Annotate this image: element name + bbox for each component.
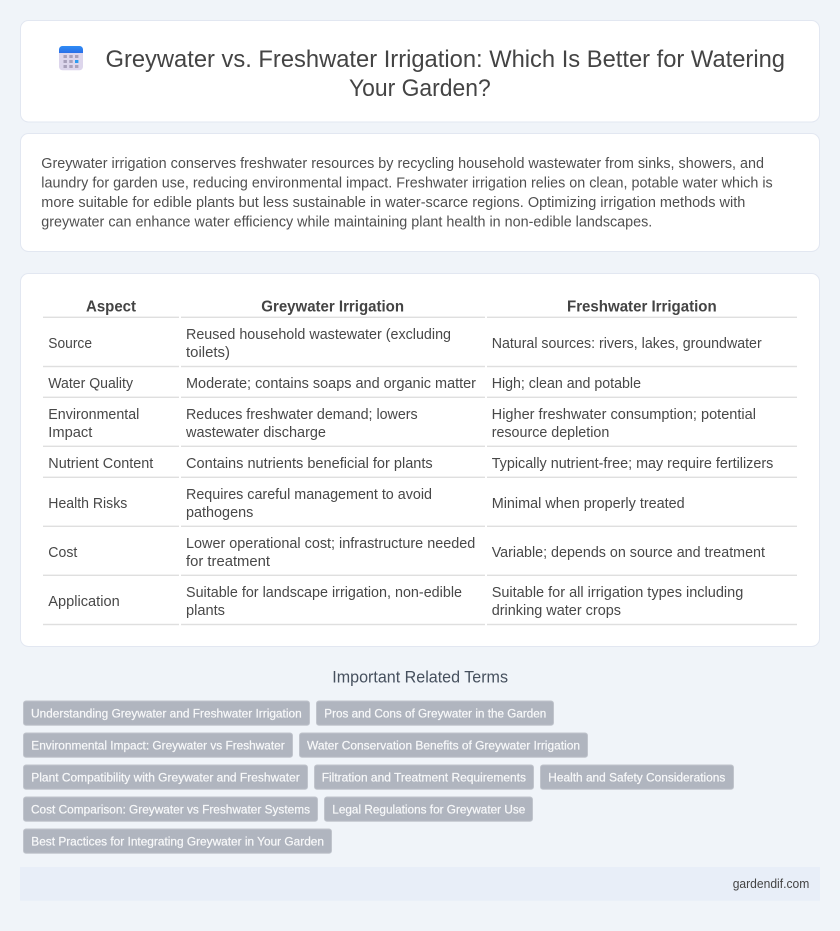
chip (316, 701, 554, 725)
row: nutrient content (48, 456, 773, 472)
panel: introduction text: laundry for garden use, reducing environmental impact. Freshwater irrigation relies on clean, potable water which is (41, 174, 773, 191)
row: environmental impact (48, 407, 756, 441)
row: water quality (48, 376, 641, 392)
row: cost: Cost (48, 545, 77, 561)
row: application: Suitable for all irrigation types including (492, 585, 743, 601)
row: health risks: Health Risks (48, 496, 127, 512)
table header row: Aspect (86, 299, 136, 316)
row: source (48, 327, 762, 361)
chip (540, 765, 734, 789)
footer bar: gardendif.com (733, 876, 809, 891)
title: Greywater vs. Freshwater Irrigation: Which Is Better for Watering (106, 46, 785, 73)
row: water quality: High; clean and potable (492, 376, 641, 392)
row: environmental impact: Impact (48, 425, 92, 441)
row: water quality: Moderate; contains soaps and organic matter (186, 376, 476, 392)
table header row (86, 299, 717, 316)
chip (314, 765, 534, 789)
row: application: plants (186, 603, 225, 619)
panel: introduction text: more suitable for edible plants but less sustainable in water-scarce regions. Optimizing irrigation methods with (41, 194, 745, 211)
table header row: Greywater Irrigation (261, 299, 404, 316)
chip: Filtration and Treatment Requirements (322, 770, 526, 784)
table header row: Freshwater Irrigation (567, 299, 717, 316)
chip (24, 733, 292, 757)
panel: introduction text: Greywater irrigation conserves freshwater resources by recycling household wastewater from sinks, showers, and (41, 155, 764, 172)
chip: Pros and Cons of Greywater in the Garden (324, 706, 546, 720)
row: application: Suitable for landscape irrigation, non-edible (186, 585, 462, 601)
row: health risks: Requires careful management to avoid (186, 487, 432, 503)
row: source: toilets) (186, 345, 230, 361)
chip (24, 701, 310, 725)
chip (300, 733, 588, 757)
row: environmental impact: Higher freshwater consumption; potential (492, 407, 756, 423)
chip: Understanding Greywater and Freshwater Irrigation (31, 706, 302, 720)
row: cost: Variable; depends on source and treatment (492, 545, 765, 561)
row: water quality: Water Quality (48, 376, 134, 392)
row: source: Natural sources: rivers, lakes, groundwater (492, 336, 762, 352)
panel: introduction text (20, 134, 820, 252)
footer bar (20, 867, 820, 901)
row: cost: for treatment (186, 554, 270, 570)
row: cost: Lower operational cost; infrastructure needed (186, 536, 475, 552)
panel: comparison table (20, 274, 820, 646)
row: source: Reused household wastewater (excluding (186, 327, 451, 343)
row: health risks: Minimal when properly treated (492, 496, 685, 512)
chip: Health and Safety Considerations (548, 770, 725, 784)
row: application: Application (48, 594, 120, 610)
panel: introduction text: greywater can enhance water efficiency while maintaining plant health in non-edible landscapes. (41, 214, 652, 231)
title: Your Garden? (349, 75, 491, 102)
panel: related term chips (24, 701, 734, 853)
chip: Plant Compatibility with Greywater and Freshwater (31, 770, 300, 784)
row: environmental impact: wastewater discharge (185, 425, 326, 441)
row: application: drinking water crops (492, 603, 621, 619)
row: environmental impact: resource depletion (492, 425, 609, 441)
row: source: Source (48, 336, 92, 352)
row: environmental impact: Reduces freshwater demand; lowers (186, 407, 418, 423)
chip (24, 829, 332, 853)
row: application (48, 585, 743, 619)
icon: calendar (59, 46, 83, 70)
title (106, 46, 785, 102)
chip: Best Practices for Integrating Greywater in Your Garden (31, 834, 324, 848)
row: nutrient content: Nutrient Content (48, 456, 153, 472)
heading: important related terms: Important Related Terms (332, 669, 508, 687)
panel: header (20, 20, 820, 122)
chip: Cost Comparison: Greywater vs Freshwater Systems (31, 802, 310, 816)
chip (24, 765, 308, 789)
chip: Water Conservation Benefits of Greywater Irrigation (307, 738, 580, 752)
row: nutrient content: Contains nutrients beneficial for plants (186, 456, 433, 472)
chip: Legal Regulations for Greywater Use (332, 802, 525, 816)
row: nutrient content: Typically nutrient-free; may require fertilizers (492, 456, 773, 472)
row: health risks: pathogens (186, 505, 253, 521)
chip (324, 797, 532, 821)
chip: Environmental Impact: Greywater vs Freshwater (31, 738, 285, 752)
row: health risks (48, 487, 685, 521)
row: cost (48, 536, 765, 570)
row: environmental impact: Environmental (48, 407, 139, 423)
chip (24, 797, 318, 821)
